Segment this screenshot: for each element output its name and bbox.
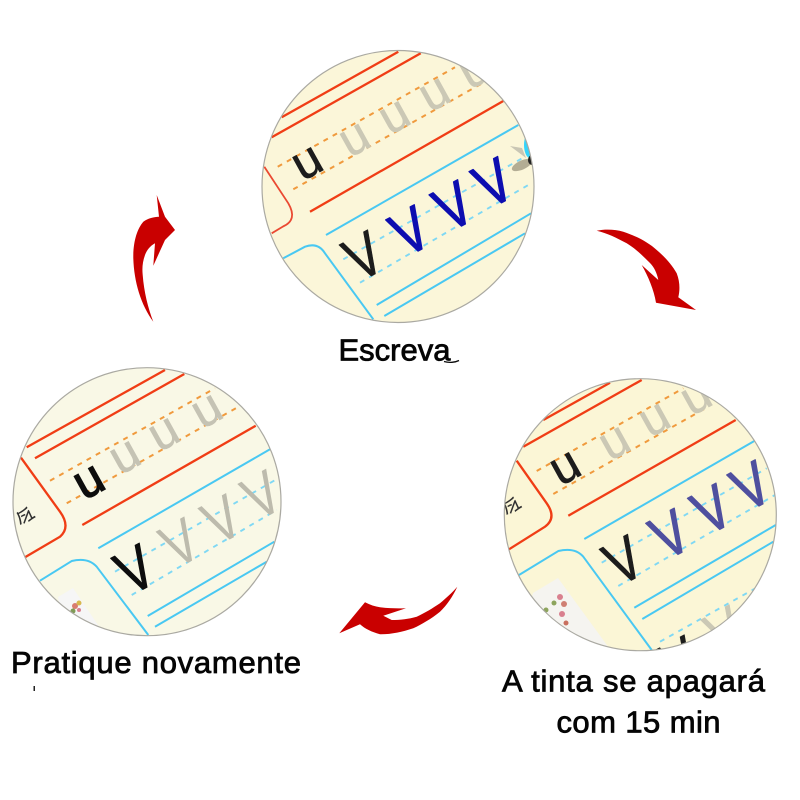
letters u, traced xyxy=(600,390,713,458)
panel: top circle, written letters xyxy=(260,39,536,325)
picture corner xyxy=(58,588,98,626)
letters u, traced: u xyxy=(449,39,499,100)
letters u, traced: u xyxy=(99,425,149,485)
label: A tinta se apagará com 15 min: A tinta se apagará xyxy=(502,664,766,699)
letters V, faded xyxy=(156,468,274,563)
picture corner xyxy=(532,578,608,646)
letters u, traced: u xyxy=(671,366,721,426)
label: A tinta se apagará com 15 min xyxy=(502,664,766,740)
letter V, model: V xyxy=(592,522,655,599)
character: 令 xyxy=(13,503,41,531)
letters u, traced: u xyxy=(329,107,379,168)
letters u, traced: u xyxy=(629,387,679,448)
panel: left circle, ink gone xyxy=(11,365,293,640)
letters u, traced: u xyxy=(181,379,231,439)
panel: right circle, ink fading xyxy=(504,378,777,652)
letters V, next row: V xyxy=(694,592,756,669)
letters u, traced: u xyxy=(409,62,459,123)
letters V, blue ink: V xyxy=(462,144,525,221)
letters V, blue ink: V xyxy=(379,192,441,269)
label: Escreva: Escreva xyxy=(338,333,451,368)
letters V, blue ink xyxy=(385,156,506,252)
letter V, model: V xyxy=(104,531,166,608)
letters u, traced xyxy=(340,66,484,155)
stray mark xyxy=(34,686,35,691)
letters u, traced: u xyxy=(589,411,639,471)
letters V, faded: V xyxy=(191,481,253,558)
letter V, model: V xyxy=(332,217,395,294)
icon: pen tip xyxy=(510,138,532,172)
letters V, fading ink: V xyxy=(639,496,701,573)
letter u, model: u xyxy=(63,450,113,510)
letters V, blue ink: V xyxy=(422,167,485,244)
letters V, fading ink: V xyxy=(681,471,743,548)
arrow: top to right xyxy=(597,230,696,310)
letters V, faded: V xyxy=(149,504,211,581)
character: 令 xyxy=(499,493,528,521)
label: A tinta se apagará com 15 min: com 15 min xyxy=(556,705,720,740)
letters V, fading ink: V xyxy=(720,447,782,524)
letters V, next row: V xyxy=(649,622,711,699)
letter u, model: u xyxy=(282,131,332,191)
arrow: left to top xyxy=(133,195,175,322)
arrow: right to left xyxy=(339,587,457,634)
letters u, traced xyxy=(110,395,224,472)
letters V, fading ink xyxy=(645,459,764,556)
letters V, next row xyxy=(656,604,732,650)
letters u, traced: u xyxy=(369,85,419,145)
label: Pratique novamente: Pratique novamente xyxy=(11,645,301,680)
letters V, faded: V xyxy=(231,456,293,533)
letter u, model: u xyxy=(540,436,590,496)
letters u, traced: u xyxy=(138,402,188,462)
